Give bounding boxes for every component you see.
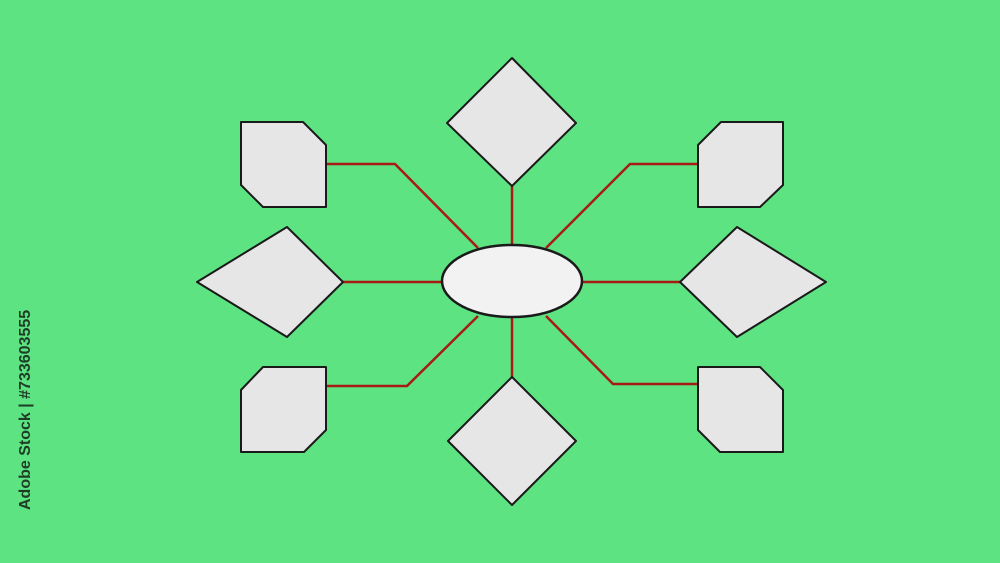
- shape: top-left octagon: [241, 122, 326, 207]
- central ellipse: [442, 245, 582, 317]
- shape: bottom-left octagon: [241, 367, 326, 452]
- watermark id text: Adobe Stock | #733603555: [17, 310, 34, 510]
- shapes: [197, 58, 826, 505]
- shape: left kite: [197, 227, 343, 337]
- shape: top-right octagon: [698, 122, 783, 207]
- shape: bottom-right octagon: [698, 367, 783, 452]
- shape: right kite: [680, 227, 826, 337]
- shape: bottom diamond: [448, 377, 576, 505]
- shape: top diamond: [447, 58, 576, 186]
- connector lines: [326, 164, 698, 386]
